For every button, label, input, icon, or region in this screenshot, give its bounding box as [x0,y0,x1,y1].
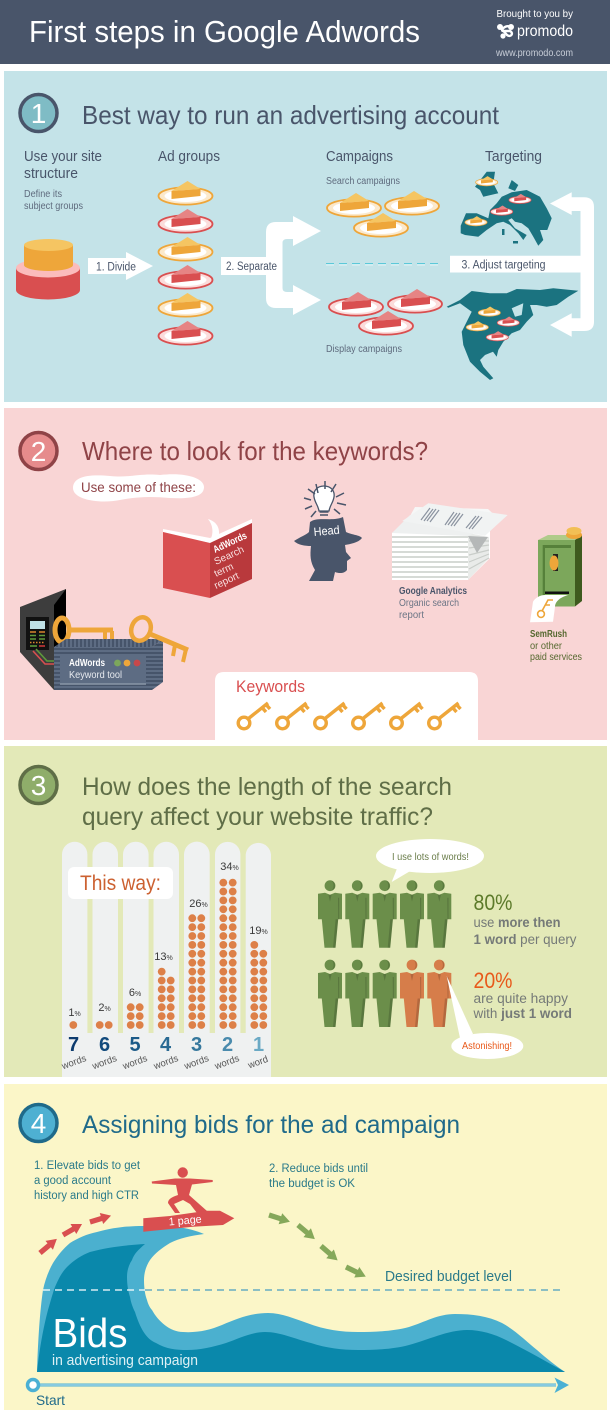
board label: 1 page [168,1214,202,1228]
semrush caption [530,629,582,663]
stat: 20 percent: 20% [474,968,512,993]
stat: 20 percent: are quite happy [474,991,568,1006]
column label: site structure: subject groups [24,201,83,212]
machine label [69,658,122,681]
number badge 2: 2 [31,436,46,467]
head label: Head [313,523,340,539]
arrow: 1. divide: 1. Divide [96,262,136,274]
machine label: AdWords [69,658,105,669]
heading 4: Assigning bids for the ad campaign [82,1111,460,1139]
promodo wordmark: promodo [517,23,573,40]
dashed separator [326,264,443,266]
word labels: words [120,1053,149,1072]
percent labels: 2% [98,1002,111,1014]
step 2 text: 2. Reduce bids until [269,1163,368,1175]
icon: stack of papers [392,503,508,580]
icon: layered cake [16,239,80,300]
number badge 2 [20,432,57,470]
speech bubble: astonishing: Astonishing! [462,1041,512,1052]
people row: 80 percent [318,880,451,948]
word count numerals: 7 [68,1034,79,1056]
percent labels: 34% [220,861,239,873]
book text: report [213,571,241,592]
book text [212,530,249,592]
word labels: words [90,1053,119,1072]
bids label: Bids [52,1310,128,1356]
book text: AdWords [212,530,249,556]
map plates: europe [465,176,531,226]
step 1 text: 1. Elevate bids to get [34,1160,141,1172]
semrush caption: SemRush [530,629,567,640]
heading 3 [82,773,452,831]
google analytics caption: Organic search [399,598,459,609]
map plates: north america [466,307,519,341]
google analytics caption [399,586,467,621]
people row: 20 percent [318,960,451,1027]
website url: www.promodo.com [495,48,573,59]
column label: site structure: Use your site [24,149,102,165]
chart: wave of bids [37,1225,565,1372]
google analytics caption: Google Analytics [399,586,467,597]
header banner [0,0,610,64]
book text: Search [213,544,246,568]
step 1 text: a good account [34,1175,112,1187]
number badge 4 [20,1104,57,1142]
icon: head with hat and light bulb [294,481,362,581]
percent labels [68,861,268,1019]
percent labels: 19% [249,925,268,937]
word count numerals: 1 [253,1034,264,1056]
number badge 1 [20,94,57,132]
row of six keys [238,703,460,729]
display campaigns label: Display campaigns [326,344,402,355]
bids label: in advertising campaign [52,1353,198,1369]
word count numerals: 3 [191,1034,202,1056]
stat: 80 percent: 80% [474,890,512,915]
word count numerals: 5 [129,1034,141,1056]
number badge 4: 4 [31,1108,46,1139]
bar chart: words per query [59,842,271,1077]
word labels: word [246,1054,270,1072]
column label: site structure: structure [24,166,78,182]
word labels [59,1053,270,1072]
machine label: Keyword tool [69,670,122,681]
word count numerals: 4 [160,1034,172,1056]
stat: 80 percent: 1 word per query [474,932,577,947]
column label: site structure [24,149,102,212]
step 2 text [269,1163,368,1190]
stat: 20 percent: with just 1 word [473,1006,572,1021]
percent labels: 26% [189,898,208,910]
percent labels: 6% [129,987,141,999]
step 1 text [34,1160,141,1202]
desired budget dashed line [43,1289,145,1291]
book text: term [213,561,235,580]
speech bubble: lots of words: I use lots of words! [392,851,469,863]
heading 3: query affect your website traffic? [82,803,433,831]
dots [69,879,267,1029]
word labels: words [151,1053,180,1072]
icon: large loose key [128,614,188,662]
start label: Start [36,1392,65,1408]
word labels: words [212,1053,241,1072]
search campaigns label: Search campaigns [326,176,400,187]
column label: campaigns: Campaigns [326,149,393,165]
timeline arrow [28,1378,569,1393]
semrush caption: or other [530,641,563,652]
arrow: 1. divide [88,252,153,280]
icon: green safe with coin [530,527,582,622]
word count numerals: 2 [222,1034,233,1056]
google analytics caption: report [399,610,424,621]
panel 1: best way to run an advertising account [4,71,607,402]
column label: site structure: Define its [24,189,62,200]
word count numerals: 6 [99,1034,110,1056]
this way label: This way: [80,872,161,895]
arrow: 2. separate [221,216,321,315]
number badge 3: 3 [31,770,46,801]
step 2 text: the budget is OK [269,1178,355,1190]
number badge 3 [20,766,57,804]
column label: ad groups: Ad groups [158,149,220,165]
map: north america [447,288,578,380]
brought to you by: Brought to you by [496,8,574,20]
panel 4: assigning bids [4,1084,607,1410]
surfer on board [143,1167,234,1232]
heading 1: Best way to run an advertising account [82,100,500,130]
speech bubble: astonishing [447,976,523,1059]
heading 2: Where to look for the keywords? [82,436,428,466]
number badge 1: 1 [31,98,46,129]
cloud label: Use some of these: [81,479,196,495]
arrow: 2. separate: 2. Separate [226,261,277,273]
map: europe [461,172,552,246]
keywords label: Keywords [236,677,305,696]
word labels: words [59,1053,88,1072]
word labels: words [182,1053,211,1072]
icon: red report book [163,519,252,598]
percent labels: 13% [154,951,173,963]
stat: 20 percent [473,968,572,1021]
arrow: 3. adjust targeting: 3. Adjust targeting [462,260,546,272]
desired budget label: Desired budget level [385,1269,512,1285]
panel 2: where to look for the keywords [4,408,607,740]
keywords card [215,672,478,740]
cloud label [73,474,204,502]
icon: keyword tool machine [20,589,163,690]
this way label [68,867,173,899]
green falling arrows [267,1209,368,1282]
stat: 80 percent: use more then [474,915,560,930]
search campaign plates [327,191,439,237]
panel 3: search query length [4,746,607,1077]
red rising arrows [36,1210,113,1257]
percent labels: 1% [68,1007,81,1019]
icon: promodo logo [497,24,514,39]
big key in lock [55,618,113,644]
speech bubble: lots of words [376,839,484,882]
word count numerals [68,1034,264,1056]
column label: targeting: Targeting [485,149,542,165]
bids label [52,1310,198,1369]
semrush caption: paid services [530,652,582,663]
title: First steps in Google Adwords [29,14,420,49]
ad group plates [158,181,212,345]
step 1 text: history and high CTR [34,1190,139,1202]
stat: 80 percent [474,890,577,947]
arrow: 3. adjust targeting [450,192,594,337]
heading 3: How does the length of the search [82,773,452,801]
display campaign plates [329,289,442,335]
